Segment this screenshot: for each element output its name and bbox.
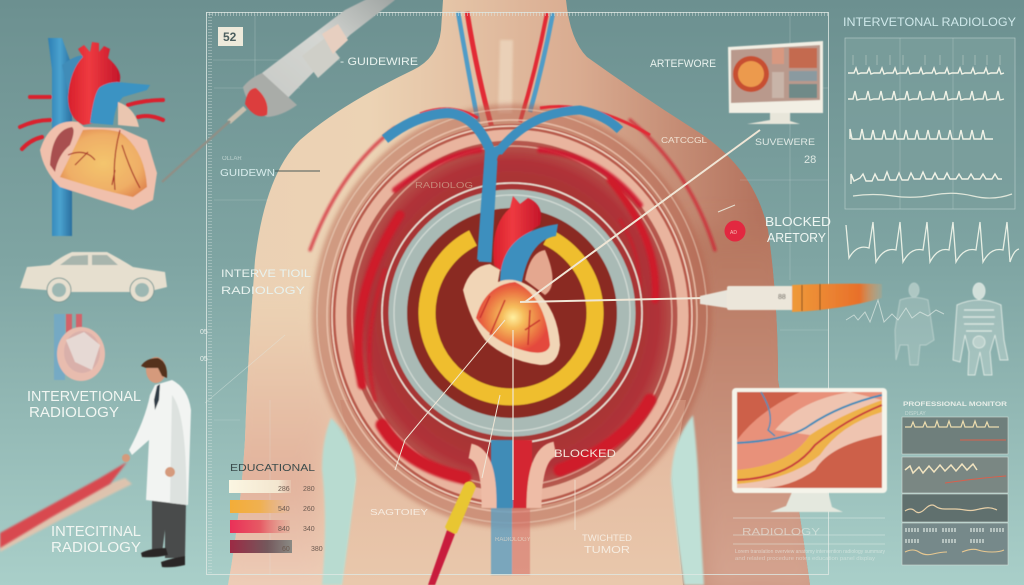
blue great vessels bbox=[385, 107, 650, 262]
badge: 52 bbox=[218, 27, 243, 46]
educational legend: 286 bbox=[278, 486, 290, 493]
catheter lines bbox=[395, 130, 760, 530]
frame labels: RADIOLOGY bbox=[221, 285, 306, 297]
torso lower bbox=[340, 400, 686, 585]
radiology text block bbox=[733, 518, 885, 562]
side vessels bbox=[20, 97, 163, 149]
frame labels: TUMOR bbox=[584, 545, 630, 556]
head bbox=[146, 357, 166, 383]
concentric artery rings bbox=[310, 104, 715, 528]
pulmonary bbox=[90, 82, 150, 125]
radiology text block: RADIOLOGY bbox=[742, 527, 820, 538]
red dot marker bbox=[718, 205, 746, 242]
frame and grid bbox=[205, 12, 828, 575]
red dot marker: AD bbox=[730, 230, 737, 236]
educational legend: 60 bbox=[282, 546, 290, 553]
right arm shading bbox=[695, 232, 810, 585]
frame labels: SAGTOIEY bbox=[370, 508, 429, 517]
gray ring bbox=[382, 183, 642, 443]
yellow ring bbox=[427, 237, 595, 397]
heart body bbox=[40, 122, 157, 210]
left labels: RADIOLOGY bbox=[51, 539, 141, 556]
educational legend: 260 bbox=[303, 506, 315, 513]
pink artery band bbox=[341, 135, 683, 497]
central lower vessels bbox=[470, 440, 555, 575]
radiology text block: Lorem translation overview anatomy intervention radiology summary bbox=[735, 549, 885, 555]
aorta bbox=[68, 42, 120, 125]
frame labels: 05 bbox=[200, 329, 208, 336]
doctor bbox=[122, 357, 191, 567]
left pink pillar bbox=[470, 451, 489, 508]
frame labels: - GUIDEWIRE bbox=[340, 56, 418, 68]
dashboard panels lower right bbox=[902, 402, 1008, 565]
right atrium shape bbox=[525, 250, 552, 295]
frame labels: SUVEWERE bbox=[755, 137, 815, 147]
badge: 52: 52 bbox=[223, 30, 237, 44]
frame labels: 28 bbox=[804, 154, 816, 166]
ECG panel top right bbox=[843, 15, 1016, 209]
educational legend: EDUCATIONAL bbox=[230, 463, 316, 474]
frame labels: OLLAR bbox=[222, 156, 242, 162]
tie bbox=[154, 384, 160, 410]
lower monitor bbox=[732, 388, 887, 512]
educational legend: 840 bbox=[278, 526, 290, 533]
legend bars bbox=[229, 480, 292, 553]
neck vessels bbox=[458, 12, 553, 135]
pulmonary artery bbox=[500, 224, 558, 282]
skeleton figure right bbox=[953, 283, 1008, 375]
left labels: INTECITINAL bbox=[51, 523, 141, 540]
ECG panel top right: INTERVETONAL RADIOLOGY bbox=[843, 15, 1016, 29]
orange injector bbox=[700, 284, 882, 312]
yellow catheter bbox=[428, 481, 476, 585]
right flap bbox=[118, 102, 139, 127]
dashboard panels lower right: PROFESSIONAL MONITOR bbox=[903, 402, 1008, 408]
small heart cross-section bbox=[54, 314, 105, 381]
educational legend: 280 bbox=[303, 486, 315, 493]
frame labels: GUIDEWN bbox=[220, 168, 275, 179]
syringe top left bbox=[162, 0, 395, 182]
heart illustration top left bbox=[20, 38, 163, 236]
left labels bbox=[27, 388, 141, 556]
frame labels: TWICHTED bbox=[582, 533, 633, 543]
educational legend bbox=[229, 463, 323, 553]
heart outer bbox=[463, 264, 560, 365]
body silhouette bbox=[210, 0, 830, 585]
left labels: RADIOLOGY bbox=[29, 404, 119, 421]
hand bbox=[165, 467, 175, 477]
left arm shading bbox=[228, 298, 340, 584]
car bbox=[20, 252, 167, 302]
trousers bbox=[152, 500, 186, 558]
heart inner bbox=[476, 282, 550, 353]
right pink pillar bbox=[534, 449, 555, 508]
educational legend: 380 bbox=[311, 546, 323, 553]
frame labels: BLOCKED bbox=[765, 214, 831, 229]
faint ECG trace bbox=[846, 300, 944, 322]
frame labels: 05 bbox=[200, 356, 208, 363]
frame labels: CATCCGL bbox=[661, 136, 708, 145]
center heart bbox=[463, 196, 560, 365]
radiology text block: and related procedure notes education panel display bbox=[735, 556, 876, 562]
left labels: INTERVETIONAL bbox=[27, 388, 141, 405]
large ECG trace bbox=[846, 222, 1019, 262]
coat bbox=[129, 380, 191, 505]
frame labels bbox=[200, 56, 831, 556]
red muscle bundle bbox=[0, 462, 132, 552]
gap right of torso bbox=[671, 415, 704, 585]
top monitor bbox=[728, 41, 823, 124]
orange injector: 88 bbox=[778, 294, 786, 301]
frame labels: RADIOLOGY bbox=[495, 537, 531, 543]
aorta bbox=[493, 196, 541, 275]
educational legend: 340 bbox=[303, 526, 315, 533]
educational legend: 540 bbox=[278, 506, 290, 513]
dashboard panels lower right: DISPLAY bbox=[905, 411, 926, 417]
frame labels: ARTEFWORE bbox=[650, 58, 716, 70]
frame labels: BLOCKED bbox=[554, 448, 616, 460]
skeleton figure left bbox=[895, 283, 934, 365]
frame labels: INTERVE TIOIL bbox=[221, 268, 311, 280]
red muscle streaks bbox=[310, 120, 715, 478]
frame labels: RADIOLOG bbox=[415, 181, 473, 190]
shoes bbox=[141, 548, 185, 567]
frame labels: ARETORY bbox=[767, 230, 826, 245]
vena cava bbox=[48, 38, 72, 236]
gap left of torso bbox=[322, 418, 356, 585]
